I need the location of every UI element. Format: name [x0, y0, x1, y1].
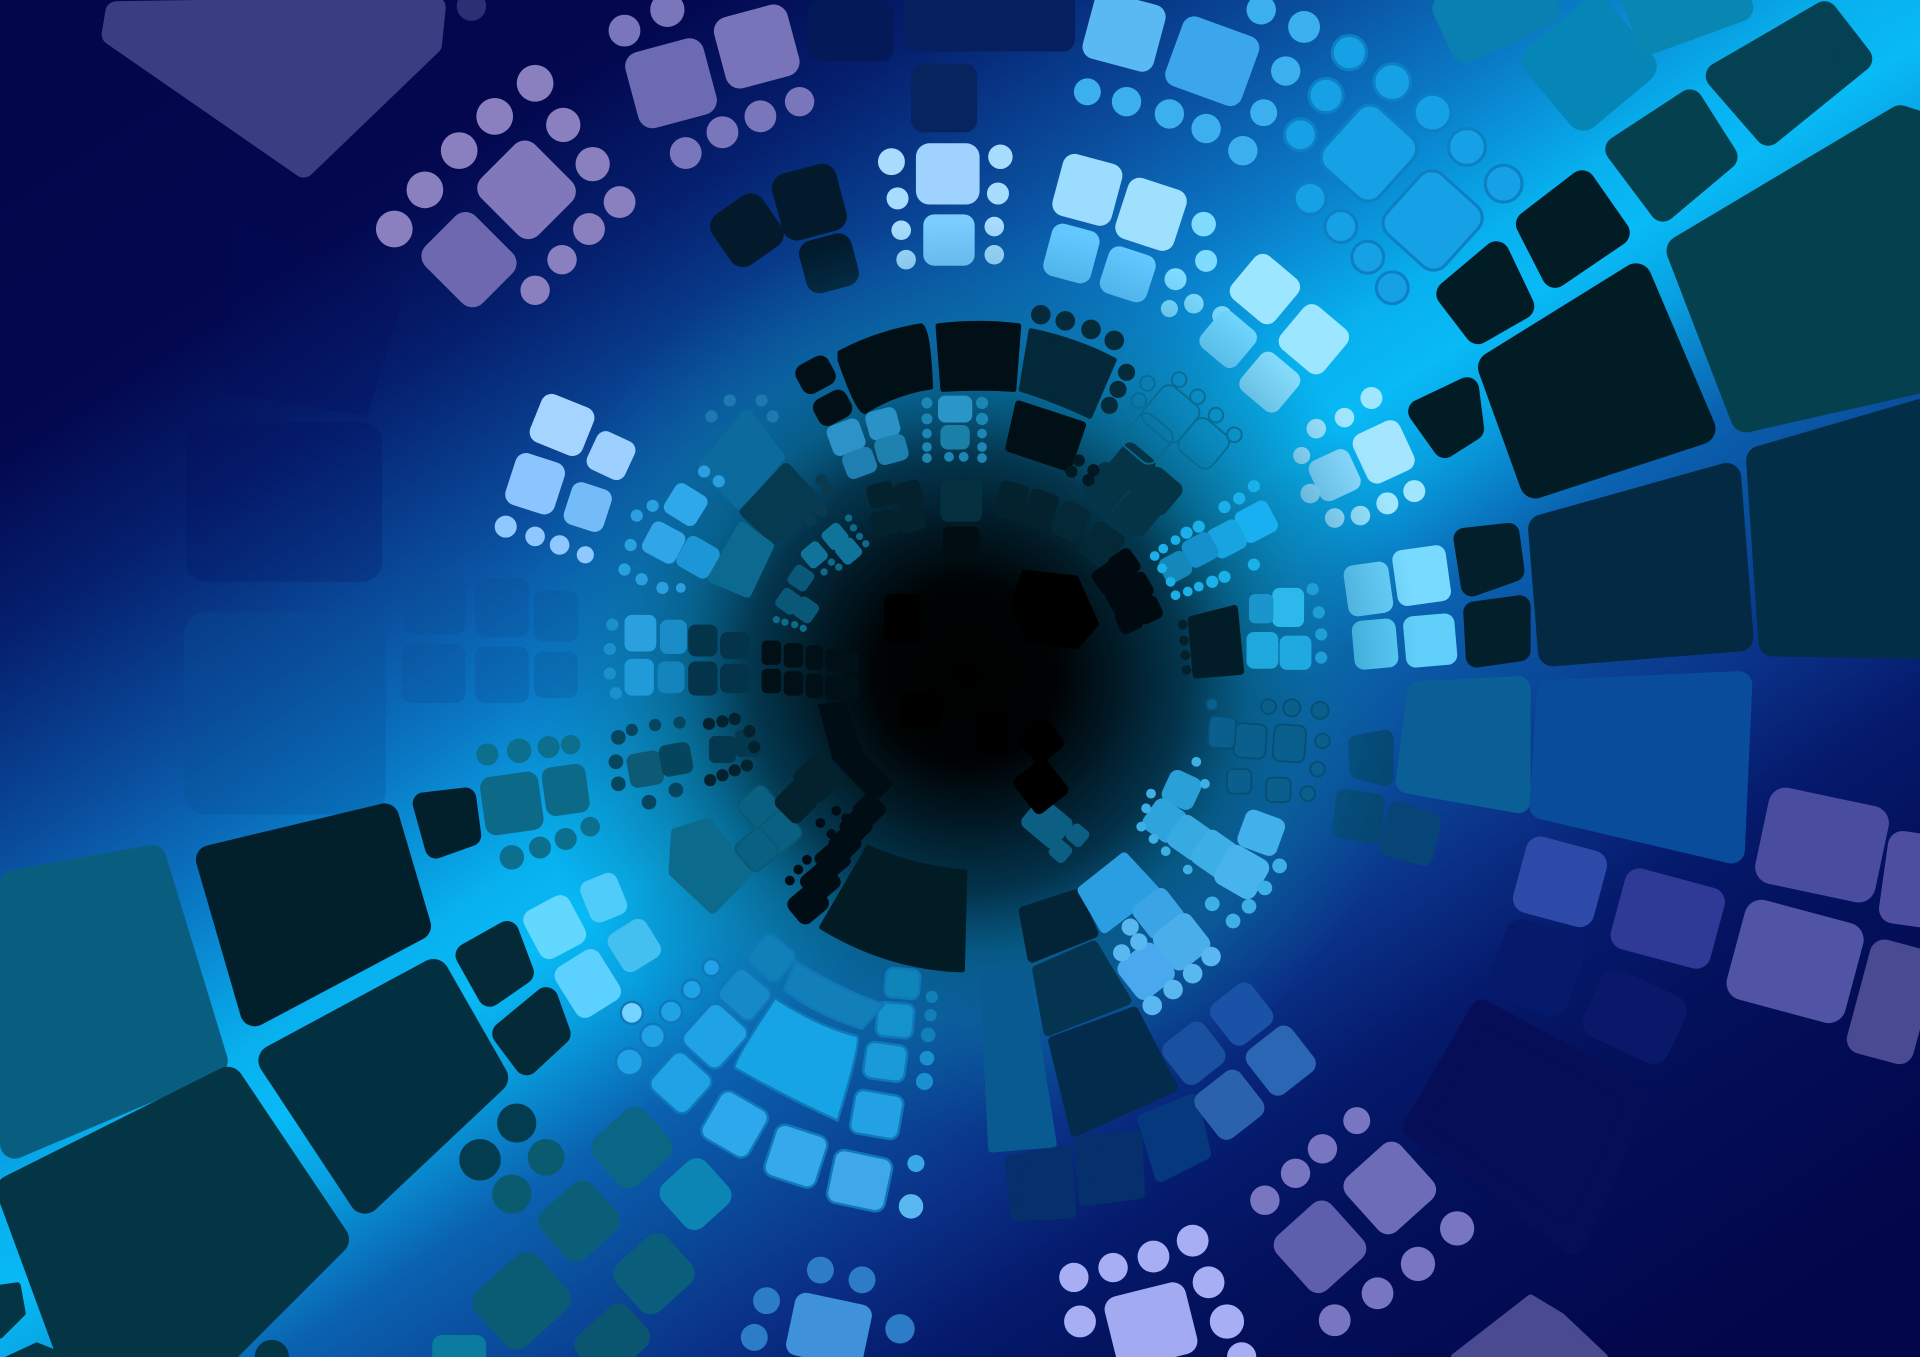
- cluster: dark bottom column tiles: [983, 857, 1205, 1215]
- cluster: cyan tiles lower left: [519, 870, 665, 1022]
- cluster: pale tiles and dots bottom: [1059, 1225, 1256, 1357]
- cluster: bright tiles lower right of centre: [1113, 884, 1221, 1015]
- cluster: outlined tiles right of centre: [1206, 698, 1330, 802]
- cluster: small ring tiles upper left of hole: [773, 514, 869, 632]
- cluster: bright tiles upper right: [1041, 151, 1232, 326]
- cluster: dark tiles upper centre: [704, 160, 862, 296]
- cluster: faint tiles below hole right: [1018, 795, 1091, 865]
- tiles: purple lower right: [1414, 784, 1920, 1243]
- ghost tiles: dark upper left: [186, 220, 404, 582]
- cluster: black tiles right of hole: [1089, 546, 1165, 636]
- tile: black slab below hole right: [1011, 756, 1071, 816]
- cluster: bright tiles upper left: [495, 391, 639, 563]
- cluster: light tiles top centre: [878, 143, 1013, 269]
- tile: large purple top left: [113, 7, 435, 167]
- tiles: teal top right: [1428, 0, 1757, 138]
- cluster: purple tiles and dots top: [457, 0, 814, 169]
- cluster: dark small tiles upper centre ring: [865, 478, 1127, 571]
- cluster: blue tiles lower left of hole: [616, 931, 938, 1219]
- cluster: cyan tiles right of centre: [1178, 583, 1327, 675]
- cluster: light tiles right: [1342, 544, 1458, 670]
- cluster: outlined tiles and rings top right: [1284, 36, 1522, 304]
- cluster: purple tiles and dots bottom right: [1250, 1107, 1474, 1336]
- blotches: dark shapes inside hole: [884, 527, 1100, 767]
- cluster: bright four tiles: [1195, 249, 1354, 417]
- cluster: small bright tiles under top arc: [825, 396, 988, 481]
- cluster: teal tiles bottom left: [255, 1101, 737, 1357]
- cluster: light tiles and dots right: [1293, 387, 1425, 528]
- tiles: dark panels lower left: [0, 799, 558, 1357]
- cluster: teal tiles lower left of centre: [476, 735, 600, 870]
- cluster: blue tiles left: [604, 615, 749, 699]
- cluster: bright tiles lower right of hole: [1136, 757, 1287, 928]
- cluster: cyan tiles upper right of centre: [1150, 480, 1281, 600]
- tiles: blue panels right: [1341, 685, 1739, 857]
- cluster: blue tiles and dots top right: [1074, 0, 1320, 165]
- cluster: purple tiles and dots upper left: [376, 65, 636, 313]
- cluster: black row left of hole: [762, 641, 860, 701]
- radial darkness over centre: [514, 220, 1420, 1127]
- cluster: dark four tiles upper right ring: [1065, 439, 1186, 540]
- cluster: teal panels upper left of centre: [703, 394, 834, 593]
- cluster: panels lower left of centre: [673, 783, 804, 909]
- tiles: dark panels upper right: [1420, 15, 1920, 656]
- tile: purple bottom edge: [1455, 1298, 1604, 1357]
- cluster: dark tiles top of centre: [792, 305, 1135, 468]
- cluster: blue tile and dots bottom centre: [741, 1257, 915, 1357]
- cluster: dark tiles left below hole: [609, 713, 762, 810]
- cluster: blue tiles left of centre: [618, 465, 725, 594]
- tiles: dark navy top centre: [808, 0, 1075, 132]
- tile: dark arc bottom of centre: [822, 848, 965, 970]
- cluster: ghost outlined tiles upper right ring: [1118, 372, 1242, 473]
- cluster: black strip lower left of hole: [772, 701, 894, 928]
- ghost tiles: faint left grid: [184, 576, 578, 814]
- cluster: blue tiles lower right of centre: [1158, 978, 1320, 1144]
